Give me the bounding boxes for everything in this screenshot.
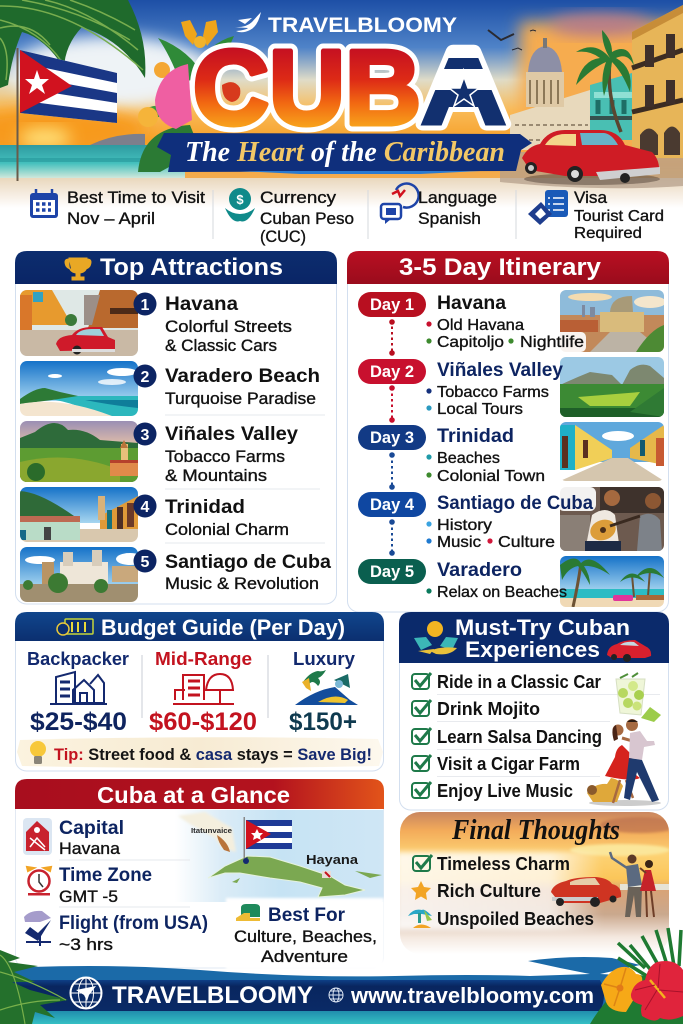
day 5 details bbox=[426, 560, 567, 601]
icon: houses bbox=[50, 672, 107, 704]
day 4 details: Culture bbox=[498, 534, 555, 551]
fact: capital: Havana bbox=[59, 839, 121, 858]
tier: luxury: Luxury bbox=[293, 649, 355, 669]
photo: Vinales mogotes bbox=[560, 357, 664, 417]
icon: yellow hibiscus bbox=[601, 967, 642, 1012]
day 2 details: Viñales Valley bbox=[437, 360, 563, 381]
item 3: Vinales Valley: 3 bbox=[141, 427, 150, 444]
photo: Trinidad street bbox=[560, 422, 664, 481]
item 5: Santiago de Cuba: 5 bbox=[141, 554, 150, 571]
fact: time zone bbox=[27, 865, 152, 906]
label: Itatunvaice: Itatunvaice bbox=[191, 826, 232, 835]
illustration: red car on the beach bbox=[551, 877, 621, 907]
fact: best for: Adventure bbox=[261, 947, 348, 966]
title: CUBA: A bbox=[420, 29, 507, 147]
icon: pink hibiscus bbox=[155, 64, 192, 129]
icon: sun and lotus bbox=[414, 621, 458, 654]
heading: Cuba at a glance bbox=[15, 779, 384, 809]
title: Final Thoughts: Final Thoughts bbox=[451, 814, 620, 846]
info: currency: Cuban Peso bbox=[260, 209, 354, 228]
item 3: Vinales Valley: Viñales Valley bbox=[165, 424, 298, 445]
tier: backpacker: Backpacker bbox=[27, 649, 129, 669]
info: currency: (CUC) bbox=[260, 227, 306, 246]
icon: island resort bbox=[295, 670, 358, 705]
info: visa: Visa bbox=[574, 188, 608, 207]
icon: small globe bbox=[329, 988, 343, 1002]
day 5 details: Varadero bbox=[437, 560, 522, 581]
info: currency bbox=[260, 188, 354, 246]
palm tree bbox=[0, 0, 145, 88]
callout: budget tip bbox=[17, 737, 383, 768]
item 4: Trinidad: Colonial Charm bbox=[165, 521, 289, 539]
website url: www.travelbloomy.com bbox=[350, 983, 594, 1008]
item 3: Vinales Valley bbox=[134, 422, 298, 485]
timeline: day markers and connectors: Day 2 bbox=[370, 363, 414, 381]
timeline: day markers and connectors: Day 3 bbox=[370, 429, 414, 447]
item 1: Havana: & Classic Cars bbox=[165, 337, 277, 355]
day 1 details bbox=[426, 293, 586, 352]
panel: itinerary bbox=[347, 251, 669, 612]
checklist bbox=[412, 672, 660, 801]
fact: flight bbox=[24, 911, 208, 954]
info: best time to visit bbox=[67, 188, 205, 228]
info: visa bbox=[574, 188, 664, 242]
timeline: day markers and connectors bbox=[358, 292, 426, 584]
building: white colonial wing bbox=[510, 90, 590, 150]
tropical flowers behind title bbox=[138, 20, 234, 172]
footer band bbox=[0, 957, 683, 1024]
item: timeless charm: Timeless Charm bbox=[437, 854, 570, 874]
timeline: day markers and connectors: Day 1 bbox=[370, 296, 414, 314]
tier: backpacker: $25-$40 bbox=[30, 708, 127, 736]
day 3 details bbox=[426, 426, 545, 485]
fact: time zone: GMT -5 bbox=[59, 887, 118, 906]
day 4 details: Santiago de Cuba bbox=[437, 493, 593, 514]
fact: capital: Capital bbox=[59, 818, 124, 839]
icon: currency: $ bbox=[236, 192, 244, 207]
photo: musicians bbox=[560, 487, 664, 551]
classic red car bbox=[522, 130, 660, 185]
heading: top attractions bbox=[15, 251, 337, 284]
item 1: Havana bbox=[134, 292, 292, 355]
heading: budget guide bbox=[15, 612, 384, 641]
icon: red hibiscus bbox=[631, 961, 683, 1021]
photo: Vinales valley bbox=[20, 421, 138, 482]
title: CUBA: CUB bbox=[193, 29, 421, 147]
capitol dome bbox=[526, 38, 564, 107]
item 4: Trinidad: Trinidad bbox=[165, 497, 245, 518]
day 1 details: Old Havana bbox=[437, 317, 524, 334]
heading: budget guide: Budget Guide (Per Day) bbox=[101, 615, 345, 640]
tier: backpacker bbox=[27, 649, 129, 736]
item 1: Havana: Havana bbox=[165, 294, 238, 315]
item: visit a cigar farm: Visit a Cigar Farm bbox=[437, 754, 580, 774]
birds bbox=[488, 30, 536, 50]
photo: Santiago de Cuba bbox=[20, 547, 144, 602]
day 2 details bbox=[426, 360, 563, 418]
fact: best for: Best For bbox=[268, 905, 346, 926]
item: rich culture: Rich Culture bbox=[437, 881, 541, 901]
day 3 details: Trinidad bbox=[437, 426, 514, 447]
header scene: beach, sky and Havana street bbox=[0, 0, 683, 208]
tier: mid-range: $60-$120 bbox=[149, 708, 257, 736]
Cuban flag on pole bbox=[16, 48, 117, 181]
day 3 details: Beaches bbox=[437, 450, 500, 467]
day 1 details: Capitoljo bbox=[437, 334, 504, 351]
heading: top attractions: Top Attractions bbox=[100, 254, 283, 281]
timeline: day markers and connectors: Day 5 bbox=[370, 563, 414, 581]
brand logo: TRAVELBLOOMY: TRAVELBLOOMY bbox=[268, 14, 457, 37]
heading: must-try experiences: Must-Try Cuban bbox=[455, 615, 630, 640]
heading: itinerary: 3-5 Day Itinerary bbox=[399, 254, 602, 281]
item 3: Vinales Valley: Tobacco Farms bbox=[165, 448, 285, 466]
title: CUBA: A bbox=[420, 29, 507, 147]
callout: budget tip: Tip: Street food & casa stays = Save Big! bbox=[54, 745, 372, 764]
map: Cuba bbox=[175, 810, 384, 970]
fact: time zone: Time Zone bbox=[59, 865, 152, 886]
fact: flight: ~3 hrs bbox=[59, 935, 113, 954]
heading: must-try experiences: Experiences bbox=[465, 637, 600, 662]
info strip bbox=[30, 184, 664, 246]
info: language bbox=[418, 188, 497, 228]
photo: Havana capitol bbox=[560, 290, 666, 352]
tier: mid-range: Mid-Range bbox=[155, 649, 252, 669]
item 2: Varadero Beach bbox=[134, 364, 320, 408]
flowers: bottom right bbox=[590, 928, 683, 1024]
icon: visa card bbox=[528, 190, 568, 225]
tier: luxury: $150+ bbox=[289, 708, 357, 736]
illustration: salsa dancers bbox=[587, 719, 661, 806]
icon: calendar bbox=[30, 189, 58, 218]
info: language: Spanish bbox=[418, 209, 481, 228]
heading: itinerary bbox=[347, 251, 669, 284]
item: ride in a classic car: Ride in a Classic Car bbox=[437, 672, 601, 692]
fact: best for bbox=[234, 904, 377, 966]
tier: mid-range bbox=[149, 649, 257, 736]
photo: Varadero palms bbox=[560, 556, 664, 607]
item 1: Havana: Colorful Streets bbox=[165, 318, 292, 336]
label: Hayana: Hayana bbox=[306, 853, 359, 867]
item: enjoy live music: Enjoy Live Music bbox=[437, 781, 573, 801]
item 5: Santiago de Cuba: Music & Revolution bbox=[165, 575, 319, 593]
item 4: Trinidad bbox=[134, 494, 289, 539]
item 5: Santiago de Cuba: Santiago de Cuba bbox=[165, 552, 331, 573]
item 2: Varadero Beach: Turquoise Paradise bbox=[165, 390, 316, 408]
logo: globe bbox=[70, 978, 102, 1008]
icon: language speech bubbles bbox=[381, 184, 419, 224]
day 4 details bbox=[426, 487, 596, 551]
day 2 details: Tobacco Farms bbox=[437, 384, 549, 401]
icon: map flag bbox=[243, 817, 292, 864]
banner: The Heart of the Caribbean bbox=[157, 133, 532, 174]
day 2 details: Local Tours bbox=[437, 401, 523, 418]
panel: must-try experiences bbox=[399, 612, 669, 810]
heading: Cuba at a glance: Cuba at a Glance bbox=[97, 782, 290, 808]
icon: mojito glass bbox=[616, 673, 661, 722]
icon: currency bbox=[225, 188, 255, 221]
heading: must-try experiences bbox=[399, 612, 669, 663]
banner: The Heart of the Caribbean: The Heart of the Caribbean bbox=[185, 137, 505, 168]
photo: Varadero beach bbox=[20, 361, 138, 416]
info: language: Language bbox=[418, 188, 497, 207]
item 1: Havana: 1 bbox=[141, 297, 150, 314]
panel: top attractions bbox=[15, 251, 337, 604]
info: currency: Currency bbox=[260, 188, 337, 207]
fact: best for: Culture, Beaches, bbox=[234, 927, 377, 946]
item 3: Vinales Valley: & Mountains bbox=[165, 467, 267, 485]
timeline: day markers and connectors: Day 4 bbox=[370, 496, 415, 514]
fact: capital bbox=[23, 818, 124, 858]
item 2: Varadero Beach: 2 bbox=[141, 369, 150, 386]
building: teal facade bbox=[590, 73, 632, 140]
day 4 details: History bbox=[437, 517, 492, 534]
item: learn salsa dancing: Learn Salsa Dancing bbox=[437, 727, 602, 747]
item 4: Trinidad: 4 bbox=[141, 499, 150, 516]
tier: luxury bbox=[289, 649, 358, 736]
item 5: Santiago de Cuba bbox=[134, 550, 331, 593]
info: best time to visit: Nov – April bbox=[67, 209, 155, 228]
panel: budget guide bbox=[15, 612, 384, 771]
panel: Cuba at a glance bbox=[15, 779, 384, 970]
building: yellow colonial bbox=[632, 5, 683, 158]
fact: flight: Flight (from USA) bbox=[59, 913, 208, 934]
palm street tree bbox=[576, 30, 634, 132]
info: best time to visit: Best Time to Visit bbox=[67, 188, 205, 207]
palm leaves: bottom left bbox=[0, 950, 68, 1024]
day 3 details: Colonial Town bbox=[437, 468, 545, 485]
item 2: Varadero Beach: Varadero Beach bbox=[165, 366, 320, 387]
day 1 details: Havana bbox=[437, 293, 506, 314]
day 5 details: Relax on Beaches bbox=[437, 584, 567, 601]
info: visa: Required bbox=[574, 225, 642, 242]
icon: red car bbox=[607, 640, 651, 662]
photo: Havana street bbox=[20, 290, 138, 356]
item: unspoiled beaches: Unspoiled Beaches bbox=[437, 909, 594, 929]
icon: hotel and umbrella bbox=[173, 674, 234, 704]
day 1 details: Nightlife bbox=[520, 334, 584, 351]
panel: final thoughts bbox=[396, 812, 680, 954]
illustration: dancing couple bbox=[610, 852, 656, 917]
brand name: TRAVELBLOOMY bbox=[112, 982, 313, 1009]
photo: Trinidad bbox=[20, 487, 138, 542]
info: visa: Tourist Card bbox=[574, 208, 664, 225]
day 4 details: Music bbox=[437, 534, 481, 551]
title: CUBA: CUB bbox=[193, 29, 421, 147]
item: drink mojito: Drink Mojito bbox=[437, 699, 540, 719]
